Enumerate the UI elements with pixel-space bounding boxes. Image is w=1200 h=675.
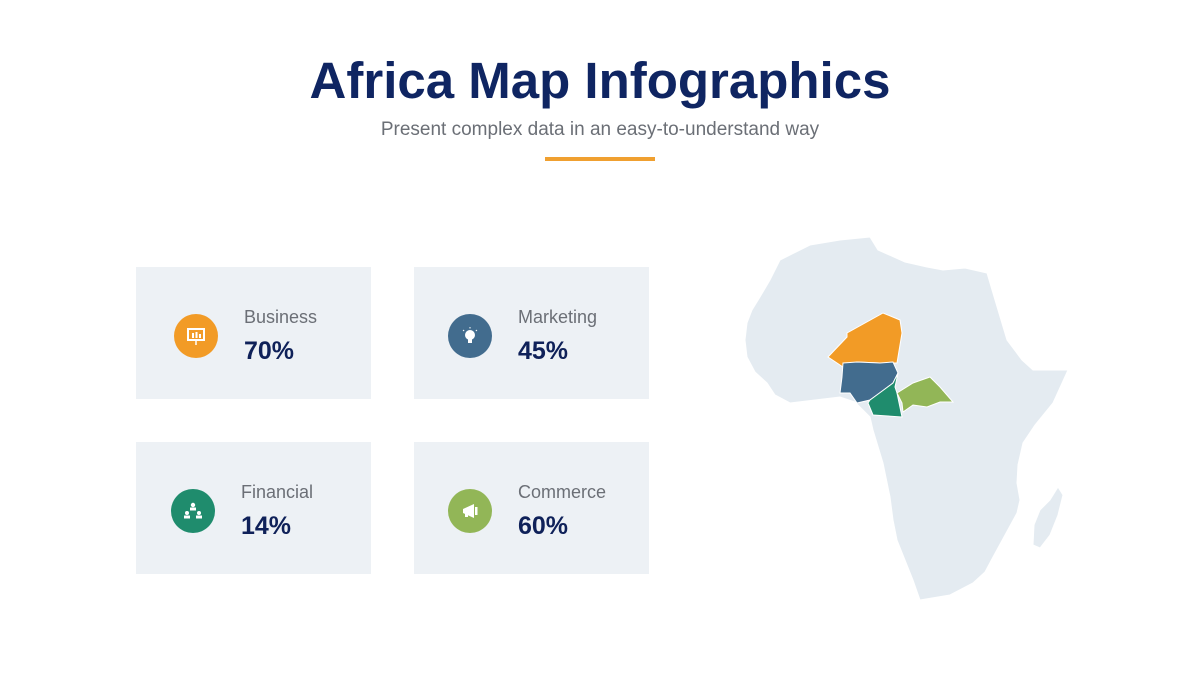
title: Africa Map Infographics bbox=[310, 52, 890, 109]
card: financial: 14% bbox=[241, 512, 291, 540]
card: commerce: 60% bbox=[518, 512, 568, 540]
card: commerce: Commerce bbox=[518, 482, 606, 502]
madagascar bbox=[1033, 487, 1063, 548]
niger bbox=[828, 313, 902, 367]
card: financial bbox=[136, 442, 371, 574]
card: marketing: Marketing bbox=[518, 307, 597, 327]
card: marketing bbox=[414, 267, 649, 399]
card: commerce bbox=[414, 442, 649, 574]
subtitle: Present complex data in an easy-to-understand way bbox=[381, 119, 819, 140]
card: marketing: 45% bbox=[518, 337, 568, 365]
icon: team bbox=[171, 489, 215, 533]
nigeria bbox=[840, 362, 898, 403]
card: business bbox=[136, 267, 371, 399]
car bbox=[897, 377, 953, 412]
card: financial: Financial bbox=[241, 482, 313, 502]
icon: bulb bbox=[448, 314, 492, 358]
card: business: Business bbox=[244, 307, 317, 327]
underline accent bbox=[545, 157, 655, 161]
cameroon bbox=[868, 373, 902, 417]
icon: megaphone bbox=[448, 489, 492, 533]
icon: presentation bbox=[174, 314, 218, 358]
continent bbox=[745, 237, 1068, 600]
card: business: 70% bbox=[244, 337, 294, 365]
